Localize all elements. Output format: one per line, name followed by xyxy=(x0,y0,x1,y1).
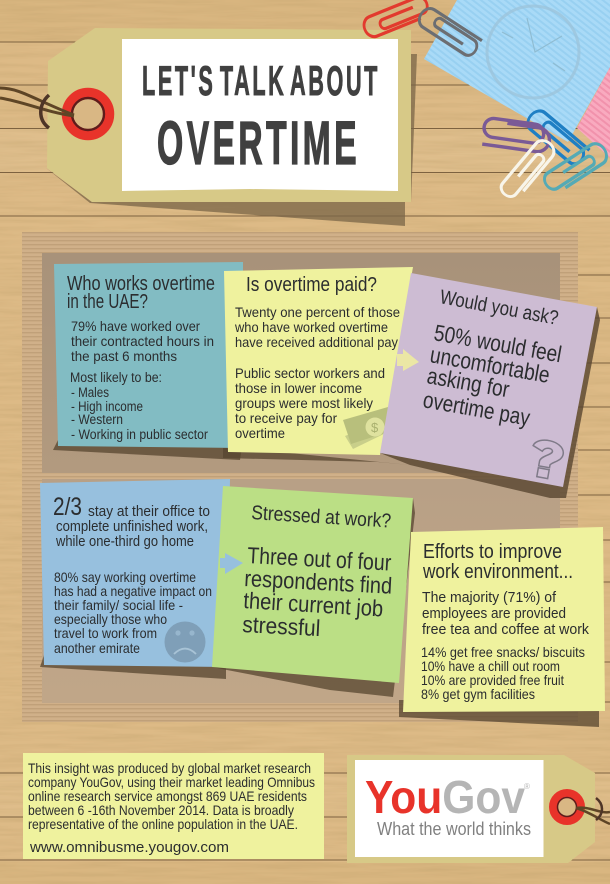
text: public sector: those in lower income xyxy=(235,380,362,396)
cardboard board xyxy=(22,232,578,722)
text: public sector: overtime xyxy=(235,425,285,441)
pink paper xyxy=(577,67,610,158)
YouGov tag xyxy=(347,755,610,863)
tag ring and string xyxy=(553,793,610,824)
text: twenty one percent xyxy=(234,304,400,350)
logo card: YouGov xyxy=(365,771,525,823)
text: three out of four: respondents find xyxy=(244,565,393,599)
panel: who works overtime xyxy=(53,262,243,460)
panel: would you ask xyxy=(380,273,600,498)
panel: methodology note xyxy=(23,753,324,859)
text: methodology: online research service amongst 869 UAE residents xyxy=(28,788,307,804)
icon: banknotes xyxy=(343,407,392,449)
text: two thirds: stay at their office to xyxy=(88,504,210,520)
text: 50 percent: asking for xyxy=(425,362,512,402)
icon: banknotes: $ xyxy=(371,420,379,435)
heading: is overtime paid: Is overtime paid? xyxy=(246,274,377,296)
text: two thirds: complete unfinished work, xyxy=(56,519,208,535)
heading: who works overtime: Who works overtime xyxy=(67,273,215,295)
text: methodology: between 6 -16th November 2014. Data is broadly xyxy=(28,802,294,818)
paperclip: teal xyxy=(541,140,610,196)
text: methodology xyxy=(28,760,315,832)
text: public sector xyxy=(235,365,385,441)
list: benefits: 10% have a chill out room xyxy=(421,658,560,674)
text: 80 percent: another emirate xyxy=(54,640,140,656)
text: the majority xyxy=(422,589,589,638)
heading: who works overtime: in the UAE? xyxy=(67,291,148,313)
text: three out of four xyxy=(242,542,393,641)
heading: efforts to improve xyxy=(422,541,573,583)
heading: efforts to improve: Efforts to improve xyxy=(423,541,562,563)
text: public sector: groups were most likely xyxy=(235,395,373,411)
text: 80 percent xyxy=(54,569,212,656)
text: two thirds xyxy=(53,493,210,550)
text: 50 percent: uncomfortable xyxy=(428,341,552,388)
text: three out of four: Three out of four xyxy=(247,542,392,576)
text: methodology: company YouGov, using their market leading Omnibus xyxy=(28,774,315,790)
icon: question mark xyxy=(528,438,565,481)
text: 79 percent xyxy=(71,318,214,364)
list: most likely to be: - Working in public sector xyxy=(71,427,208,442)
list: most likely to be xyxy=(70,370,208,442)
text: methodology: representative of the online population in the UAE. xyxy=(28,816,298,832)
text: methodology: This insight was produced by global market research xyxy=(28,760,311,776)
text: twenty one percent: Twenty one percent of those xyxy=(235,304,400,320)
list: most likely to be: Most likely to be: xyxy=(70,370,162,385)
text: 80 percent: their family/ social life - xyxy=(54,597,183,613)
text: the majority: employees are provided xyxy=(422,605,566,622)
text: 79 percent: the past 6 months xyxy=(71,348,177,364)
logo card: ® xyxy=(524,782,530,791)
icon: sad face xyxy=(164,622,206,662)
text: three out of four: their current job xyxy=(243,587,384,622)
list: most likely to be: - Males xyxy=(71,385,109,400)
tag ring and string xyxy=(0,88,110,136)
text: 79 percent: 79% have worked over xyxy=(71,318,200,334)
arrow: blue xyxy=(220,553,243,574)
text: twenty one percent: who have worked overtime xyxy=(234,319,388,335)
text: 50 percent xyxy=(421,319,564,431)
heading: efforts to improve: work environment... xyxy=(422,561,573,583)
blue paper with clock xyxy=(424,0,610,142)
title card: OVERTIME xyxy=(157,109,360,177)
title card xyxy=(122,39,398,191)
paperclip: blue xyxy=(524,107,589,167)
list: benefits: 14% get free snacks/ biscuits xyxy=(421,644,585,660)
panel: efforts to improve xyxy=(399,527,605,727)
text: 80 percent: travel to work from xyxy=(54,625,157,641)
arrow: yellow xyxy=(397,349,419,371)
paperclip: purple xyxy=(482,117,551,153)
text: 80 percent: especially those who xyxy=(54,611,167,627)
text: the majority: free tea and coffee at work xyxy=(422,621,589,638)
text: 50 percent: overtime pay xyxy=(421,386,532,431)
paperclip: grey xyxy=(416,5,482,58)
panel: 2/3 stay at office xyxy=(40,479,230,679)
text: 80 percent: has had a negative impact on xyxy=(54,583,212,599)
list: benefits: 10% are provided free fruit xyxy=(421,672,564,688)
logo card: What the world thinks xyxy=(377,819,531,839)
text: the majority: The majority (71%) of xyxy=(422,589,557,606)
list: most likely to be: - Western xyxy=(71,412,123,427)
heading: stressed at work: Stressed at work? xyxy=(251,502,392,533)
text: 50 percent: 50% would feel xyxy=(432,319,564,367)
text: 80 percent: 80% say working overtime xyxy=(54,569,196,585)
text: two thirds: while one-third go home xyxy=(55,534,194,550)
paperclip: white xyxy=(498,137,558,202)
list: benefits xyxy=(421,644,585,702)
list: most likely to be: - High income xyxy=(71,399,143,414)
main tag xyxy=(0,28,417,226)
title card: LET'S TALK ABOUT xyxy=(142,57,380,104)
text: two thirds: 2/3 xyxy=(53,493,82,521)
text: website: www.omnibusme.yougov.com xyxy=(29,839,229,856)
panel: stressed at work xyxy=(212,486,415,697)
paperclip: red xyxy=(361,0,431,39)
text: three out of four: stressful xyxy=(242,611,321,641)
text: public sector: Public sector workers and xyxy=(235,365,385,381)
text: public sector: to receive pay for xyxy=(235,410,337,426)
heading: would you ask: Would you ask? xyxy=(438,286,560,330)
text: twenty one percent: have received additional pay xyxy=(235,334,398,350)
logo card xyxy=(355,760,544,857)
list: benefits: 8% get gym facilities xyxy=(421,686,535,702)
heading: who works overtime xyxy=(67,273,215,313)
text: 79 percent: their contracted hours in xyxy=(71,333,214,349)
panel: is overtime paid xyxy=(223,267,413,465)
